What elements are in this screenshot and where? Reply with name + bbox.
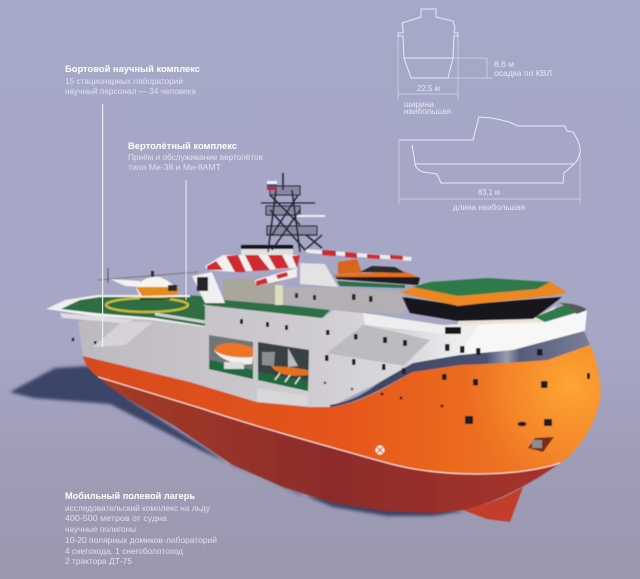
dimension labels: ширина: [404, 100, 435, 109]
callout line: onboard science: [102, 104, 103, 347]
upper green deck: [337, 281, 405, 288]
wheelhouse roof: [400, 278, 567, 306]
callout line: helicopter: [186, 180, 187, 300]
deck house grey: [223, 276, 283, 305]
crane box: [197, 277, 208, 291]
helicopter: [98, 268, 198, 299]
text: mobile field camp: 10-20 полярных домиков-лабораторий: [65, 535, 217, 545]
anchor recess: [528, 437, 554, 452]
side windows: [72, 319, 590, 426]
helipad: [46, 295, 205, 327]
text: helicopter complex: [128, 141, 264, 172]
hull orange: [83, 345, 600, 474]
lifeboat bay 2: [258, 342, 309, 391]
text: onboard science complex: научный персонал — 34 человека: [65, 86, 196, 96]
white front overhang: [363, 313, 479, 337]
main crane boom: [205, 255, 300, 272]
bow highlight: [400, 345, 600, 474]
text: helicopter complex: типа Ми-38 и Ми-8АМТ: [128, 162, 221, 172]
dimension labels: 83,1 м: [478, 188, 500, 197]
mast: [261, 173, 322, 252]
text: mobile field camp: [65, 491, 217, 566]
navy stripe: [330, 331, 590, 407]
ship: [46, 173, 600, 522]
upper level wall: [283, 287, 405, 314]
side shadow panel: [327, 325, 440, 366]
text: mobile field camp: исследовательский комплекс на льду: [65, 503, 211, 513]
schematic: cross section: [398, 9, 493, 100]
text: mobile field camp: 4 снегохода, 1 снегоболотоход: [65, 546, 183, 556]
skeg: [463, 487, 523, 522]
text: mobile field camp: 400-500 метров от судна: [65, 513, 167, 523]
white tower house: [300, 263, 338, 287]
dimension labels: 22,5 м: [417, 84, 440, 93]
dimension labels: наибольшая: [404, 107, 451, 116]
anchor: [532, 440, 542, 448]
text: onboard science complex: 15 стационарных лабораторий: [65, 76, 183, 86]
lower crane boom: [255, 268, 297, 286]
flag: [267, 181, 277, 190]
front deck window: [445, 327, 461, 334]
bow deck and bulwark: [535, 303, 587, 322]
schematic: side view: [399, 117, 580, 204]
hull white stripe: [98, 377, 560, 474]
white bow bulwark: [460, 310, 587, 355]
lifeboat bay 1: [209, 335, 253, 379]
hovercraft: [334, 259, 420, 285]
life ring emblem: [375, 445, 385, 455]
hull underwater red: [98, 377, 560, 513]
white crane post: [192, 272, 225, 303]
upper windows: [295, 293, 372, 302]
text: onboard science complex: Бортовой научный комплекс: [65, 64, 200, 74]
green main deck: [190, 295, 330, 318]
dimension labels: осадка по КВЛ: [494, 69, 552, 78]
ship shadow on ice: [10, 366, 465, 516]
superstructure side: [78, 305, 470, 407]
beige house: [275, 285, 283, 305]
dimension labels: 8,6 м: [494, 60, 514, 69]
lower front wall: [365, 325, 470, 373]
stern stairs: [93, 322, 153, 347]
text: mobile field camp: научные полигоны: [65, 524, 136, 534]
text: mobile field camp: Мобильный полевой лагерь: [65, 491, 195, 501]
text: mobile field camp: 2 трактора ДТ-75: [65, 556, 132, 566]
dimension labels: длина наибольшая: [453, 203, 525, 212]
wheelhouse base: [458, 305, 557, 325]
radar bar: [297, 215, 325, 217]
text: onboard science complex: [65, 64, 200, 96]
lower side panel: [257, 388, 308, 406]
wheelhouse window band: [402, 297, 562, 321]
rear crane boom: [305, 249, 412, 261]
text: helicopter complex: Приём и обслуживание вертолётов: [128, 152, 264, 162]
house behind mast: [241, 245, 293, 256]
text: helicopter complex: Вертолётный комплекс: [128, 141, 237, 151]
dimension labels: [404, 60, 552, 212]
